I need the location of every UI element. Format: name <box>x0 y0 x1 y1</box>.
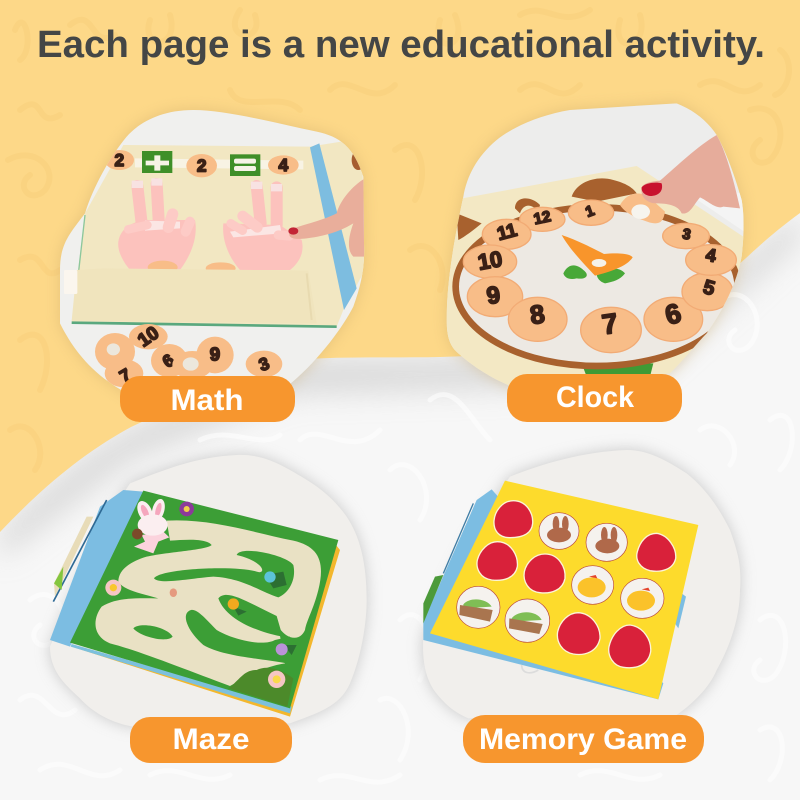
blue cover <box>423 489 663 699</box>
crate cards <box>457 586 550 642</box>
white board edge <box>740 193 744 220</box>
egg cards <box>457 501 676 668</box>
clock face <box>456 207 738 366</box>
background: wave shadow <box>0 213 800 560</box>
pocket <box>72 268 243 320</box>
brown ear <box>352 154 361 170</box>
loose coins <box>95 322 282 387</box>
label tag <box>64 270 77 294</box>
book layers <box>50 490 340 717</box>
peg <box>170 588 177 597</box>
hour coins <box>463 200 736 353</box>
memory blob shadow <box>423 450 740 718</box>
velcro strip <box>135 158 303 169</box>
carrot hand <box>562 235 633 283</box>
label: memory game: Memory Game <box>479 723 687 756</box>
math photo <box>60 110 364 390</box>
green stem <box>584 363 654 374</box>
hour numbers: 3 <box>681 226 692 244</box>
panel: clock <box>444 101 749 392</box>
green page <box>70 491 338 708</box>
hour numbers: 1 <box>584 203 597 221</box>
yellow page <box>430 481 698 699</box>
chick cards <box>572 566 664 618</box>
panel: memory game <box>423 450 740 718</box>
hour numbers: 12 <box>532 208 552 228</box>
equation numbers: 2 <box>197 156 206 176</box>
blue strap <box>310 143 357 310</box>
loose coins: 10 <box>134 322 163 351</box>
label: clock <box>507 374 682 422</box>
panel: maze <box>50 455 367 727</box>
maze path <box>95 520 321 686</box>
felt page <box>72 138 365 327</box>
maze blob shadow <box>50 455 367 727</box>
hour numbers <box>476 203 718 340</box>
equals tile <box>230 154 260 176</box>
label: clock: Clock <box>556 381 634 414</box>
equation numbers: 4 <box>279 155 289 175</box>
loose coins: 7 <box>116 364 134 386</box>
math blob shadow <box>60 110 364 397</box>
right felt hand <box>223 182 303 270</box>
held coin <box>620 193 665 223</box>
title: Each page is a new educational activity. <box>37 24 765 66</box>
clock blob shadow <box>447 103 744 388</box>
label: maze <box>130 717 292 763</box>
loose coins: 9 <box>210 344 220 365</box>
panel: math <box>57 107 367 392</box>
clock photo <box>446 104 744 386</box>
hour numbers: 6 <box>662 297 684 331</box>
memory blob <box>423 450 740 718</box>
label: math: Math <box>170 384 244 417</box>
bunny cards <box>539 513 627 561</box>
hidden coins in pocket <box>148 260 236 270</box>
equation coins <box>105 150 299 177</box>
bush <box>228 668 293 707</box>
hour numbers: 8 <box>528 298 546 330</box>
red eggs <box>477 501 676 668</box>
brown ears <box>572 178 637 202</box>
maze blob <box>50 455 367 727</box>
felt page <box>446 166 744 386</box>
fingers <box>641 135 740 214</box>
equation numbers: 2 <box>115 150 124 170</box>
label: math <box>120 376 295 422</box>
hour numbers: 10 <box>476 246 504 275</box>
label: maze: Maze <box>172 723 250 756</box>
loose coins: 6 <box>159 350 178 372</box>
hour numbers: 9 <box>485 282 502 310</box>
bunny <box>132 497 169 553</box>
background: yellow wave <box>0 0 800 532</box>
hour numbers: 7 <box>600 307 620 340</box>
hand pointing <box>289 178 365 257</box>
hour numbers: 11 <box>495 219 519 244</box>
blue tab and hook <box>675 593 686 628</box>
left felt hand <box>118 178 196 270</box>
maze walls <box>133 551 294 663</box>
hour numbers: 4 <box>704 245 718 266</box>
equation numbers <box>114 153 289 172</box>
hour numbers: 5 <box>701 276 717 300</box>
flowers <box>105 502 297 688</box>
label: memory game <box>463 715 704 763</box>
plus tile <box>142 151 172 173</box>
loose coins: 3 <box>256 353 272 375</box>
